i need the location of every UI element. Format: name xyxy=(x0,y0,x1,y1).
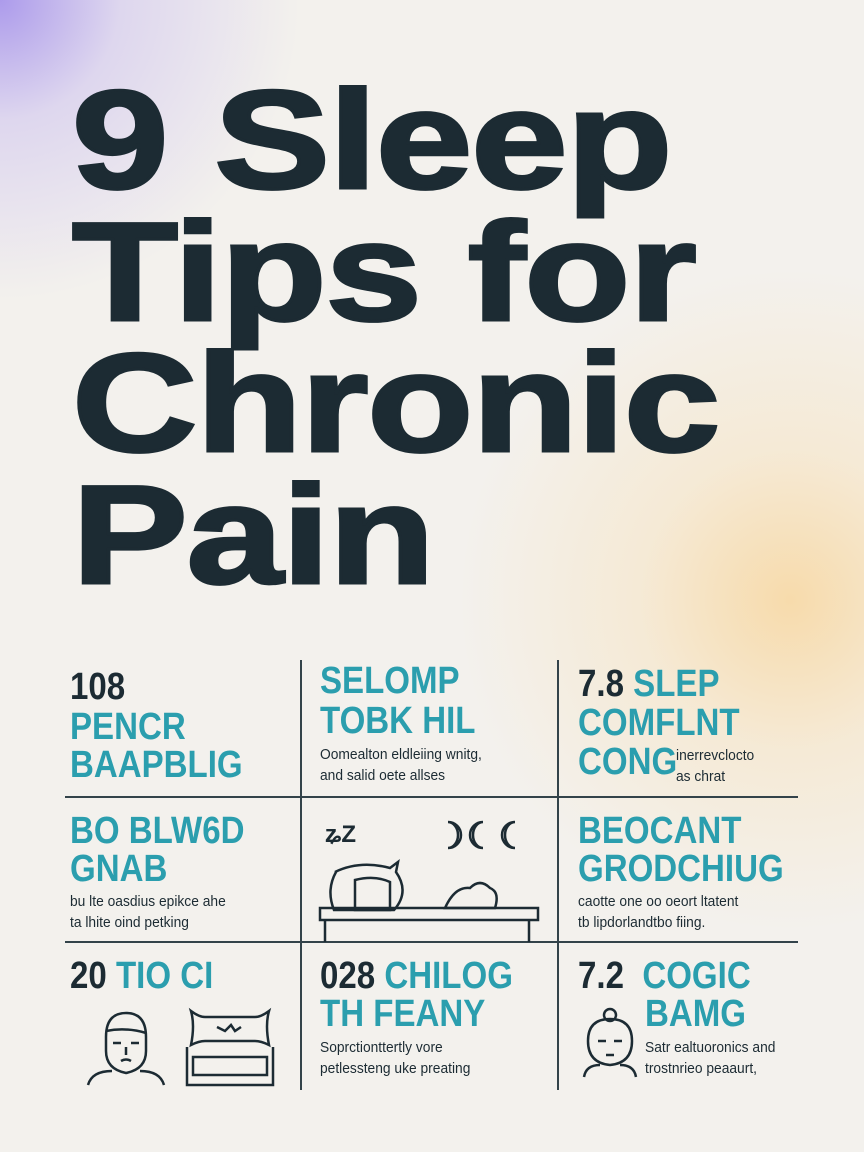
panel: tip 6: tb lipdorlandtbo fiing. xyxy=(578,914,705,931)
panel: tip 1: BAAPBLIG xyxy=(70,744,243,786)
panel: tip 6: BEOCANT xyxy=(578,810,741,852)
panel: tip 9: 7.2 COGIC xyxy=(578,955,751,997)
panel: tip 1: PENCR xyxy=(70,706,186,748)
panel: tip 9: Satr ealtuoronics and xyxy=(645,1039,775,1056)
panel: tip 8: TH FEANY xyxy=(320,993,485,1035)
panel: tip 6 xyxy=(578,810,784,931)
panel: tip 2 xyxy=(320,660,482,784)
panel: tip 9: BAMG xyxy=(645,993,746,1035)
panel: tip 4: GNAB xyxy=(70,848,167,890)
title: Pain xyxy=(72,456,434,613)
title: Tips for xyxy=(72,193,695,350)
panel: tip 3: inerrevclocto xyxy=(676,747,754,764)
panel: tip 3: 7.8 SLEP xyxy=(578,663,719,705)
panel: tip 2: TOBK HIL xyxy=(320,700,476,742)
icon: sleeping in bed: ʑZ xyxy=(325,821,356,848)
icon: sleeping in bed xyxy=(318,820,540,942)
title: Chronic xyxy=(72,324,719,481)
panel: tip 2: SELOMP xyxy=(320,660,460,702)
panel: tip 1 xyxy=(70,666,243,786)
panel: tip 2: and salid oete allses xyxy=(320,767,445,784)
panel: tip 6: caotte one oo oeort ltatent xyxy=(578,893,738,910)
icon: bed xyxy=(186,1008,274,1086)
panel: tip 8 xyxy=(320,955,513,1077)
panel: tip 4: bu lte oasdius epikce ahe xyxy=(70,893,226,910)
title: 9 Sleep xyxy=(72,61,671,218)
panel: tip 7 xyxy=(70,955,274,1086)
panel: tip 1: 108 xyxy=(70,666,125,708)
icon: tired face xyxy=(86,1012,166,1086)
panel: tip 6: GRODCHIUG xyxy=(578,848,784,890)
panel: tip 9 xyxy=(578,955,775,1078)
panel: tip 3: COMFLNT xyxy=(578,702,740,744)
panel: tip 3: CONG xyxy=(578,741,677,783)
panel: tip 8: petlessteng uke preating xyxy=(320,1060,470,1077)
title xyxy=(72,61,719,613)
icon: calm face xyxy=(582,1008,638,1078)
panel: tip 4: ta lhite oind petking xyxy=(70,914,189,931)
panel: tip 3 xyxy=(578,663,754,785)
panel: tip 8: 028 CHILOG xyxy=(320,955,513,997)
panel: tip 4: BO BLW6D xyxy=(70,810,244,852)
panel: tip 7: 20 TIO CI xyxy=(70,955,213,997)
panel: tip 9: trostnrieo peaaurt, xyxy=(645,1060,757,1077)
panel: tip 3: as chrat xyxy=(676,768,725,785)
panel: tip 8: Soprctionttertly vore xyxy=(320,1039,443,1056)
panel: tip 2: Oomealton eldleiing wnitg, xyxy=(320,746,482,763)
panel: tip 4 xyxy=(70,810,244,931)
